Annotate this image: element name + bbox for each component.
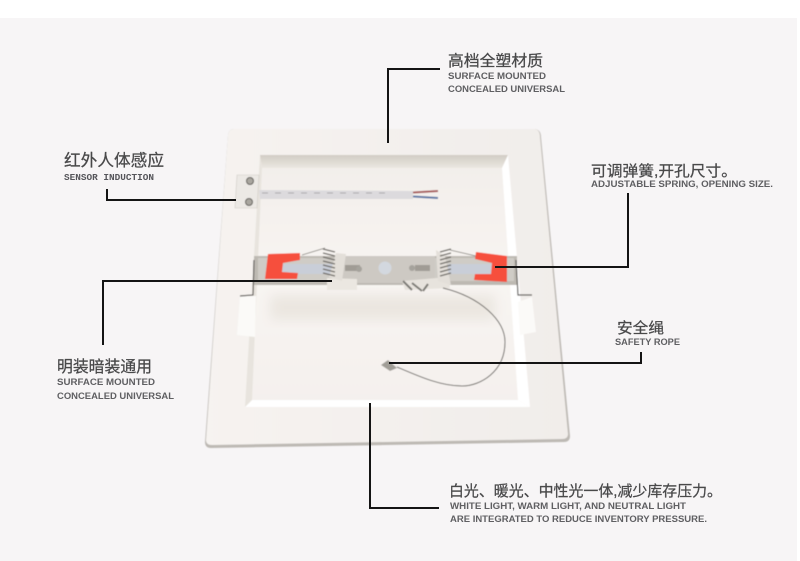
right notch xyxy=(518,297,536,335)
leader line: sensor xyxy=(107,189,236,200)
left white tab xyxy=(327,278,357,290)
recess top wall xyxy=(260,155,508,168)
frame outer edge xyxy=(205,129,570,448)
text block: sensor xyxy=(64,151,164,183)
safety rope end xyxy=(381,360,397,371)
recess floor xyxy=(245,155,530,407)
leader line: surface and concealed mounting xyxy=(103,281,332,345)
left spring xyxy=(323,249,335,276)
text block: safety rope: SAFETY ROPE xyxy=(615,337,680,348)
text block: mounting: SURFACE MOUNTED xyxy=(57,377,155,388)
left notch xyxy=(237,296,256,337)
right retaining clip wire xyxy=(516,260,532,295)
product photo: square panel light back xyxy=(205,129,570,448)
text block: material: CONCEALED UNIVERSAL xyxy=(448,84,565,95)
text block: mounting: CONCEALED UNIVERSAL xyxy=(57,391,174,402)
frame face xyxy=(206,129,568,445)
mounting bracket xyxy=(254,248,517,291)
safety rope wire xyxy=(397,288,505,386)
text block: safety rope: 安全绳 xyxy=(617,319,664,337)
recess bottom wall xyxy=(245,400,530,407)
leader line: safety rope xyxy=(389,352,641,363)
text block: material: 高档全塑材质 xyxy=(448,52,543,70)
right red clip xyxy=(474,252,507,282)
leader line: material xyxy=(388,69,440,143)
text block: material xyxy=(448,52,565,95)
leader line: light colours xyxy=(370,403,439,508)
text block: light colours: WHITE LIGHT, WARM LIGHT, AND NEUTRAL LIGHT xyxy=(450,501,686,512)
leader line: spring xyxy=(495,193,628,267)
text block: spring: 可调弹簧,开孔尺寸。 xyxy=(591,163,737,180)
text block: sensor: SENSOR INDUCTION xyxy=(64,172,154,183)
recess left wall xyxy=(245,155,262,407)
cable xyxy=(259,190,438,199)
recess right wall xyxy=(502,155,530,407)
safety hook xyxy=(403,281,428,291)
sensor plate xyxy=(235,175,259,208)
left red clip xyxy=(265,253,300,279)
text block: spring xyxy=(591,163,773,190)
right spring xyxy=(440,249,451,276)
text block: sensor: 红外人体感应 xyxy=(64,151,164,170)
text block: mounting xyxy=(57,358,174,402)
text block: light colours xyxy=(449,483,722,525)
right white tab xyxy=(402,277,450,290)
text block: light colours: 白光、暖光、中性光一体,减少库存压力。 xyxy=(449,483,722,500)
text block: spring: ADJUSTABLE SPRING, OPENING SIZE. xyxy=(591,179,773,190)
text block: material: SURFACE MOUNTED xyxy=(448,71,546,82)
text block: safety rope xyxy=(615,319,680,348)
text block: mounting: 明装暗装通用 xyxy=(57,358,152,376)
text block: light colours: ARE INTEGRATED TO REDUCE INVENTORY PRESSURE. xyxy=(450,514,707,525)
shadow under bracket xyxy=(270,295,495,320)
left retaining clip wire xyxy=(240,260,254,296)
